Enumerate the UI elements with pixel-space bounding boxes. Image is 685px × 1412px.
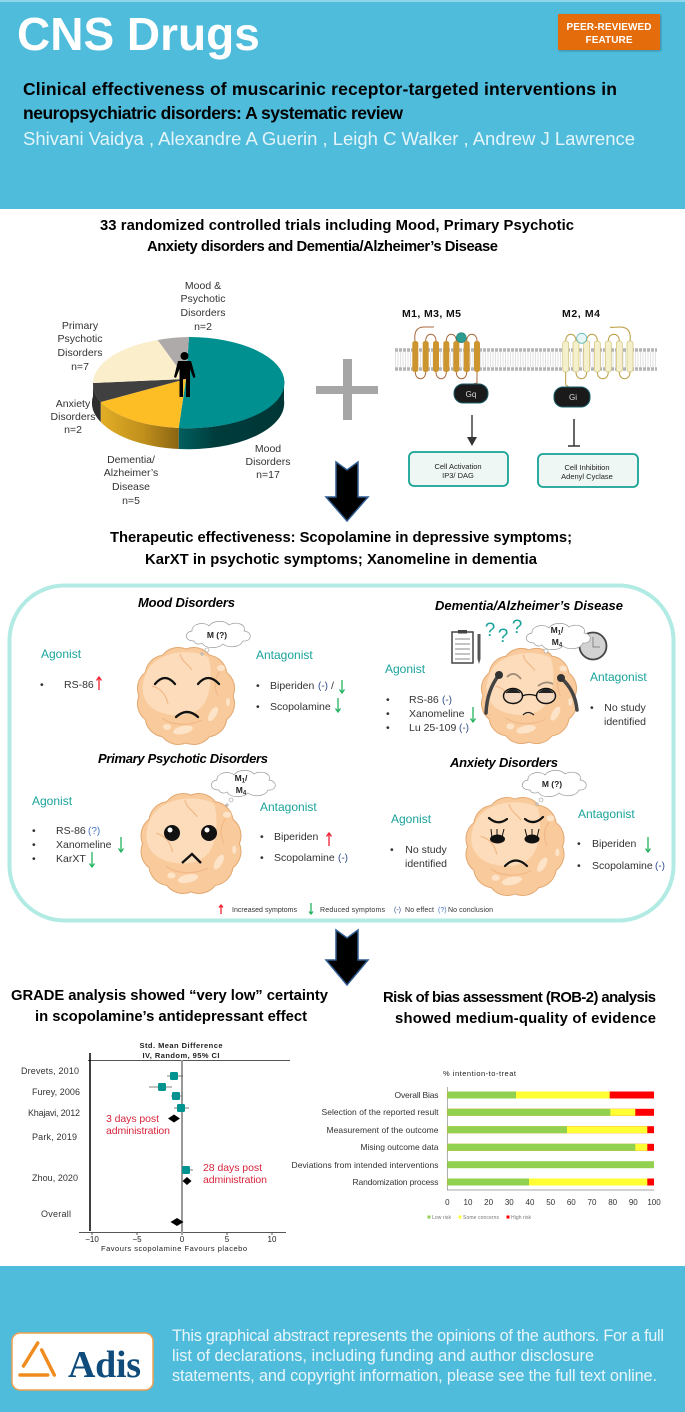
axis ticks: 70 [588, 1198, 597, 1207]
heading: therapeutic effectiveness: KarXT in psychotic symptoms; Xanomeline in dementia [145, 552, 538, 568]
bars [447, 1092, 654, 1186]
icon: person [174, 352, 196, 397]
thought bubble: M1/M4: 4 [559, 642, 563, 648]
pie chart: trials by disorder [92, 337, 285, 449]
panel section: dementia: No study [604, 702, 646, 714]
forest plot: −5 [132, 1235, 142, 1244]
pie labels [51, 280, 290, 507]
box: cell activation: IP3/ DAG [442, 471, 474, 480]
panel section: dementia: • [590, 702, 594, 714]
pie labels: Disorders [58, 347, 102, 359]
thought bubble: M1/M4: 4 [243, 790, 247, 796]
arrow: down 1 [326, 462, 368, 521]
panel section: anxiety disorders: No study [405, 844, 447, 856]
pie labels: Psychotic [58, 333, 102, 345]
panel section: primary psychotic disorders [32, 751, 348, 893]
footer band [0, 1266, 685, 1412]
chart legend [428, 1215, 532, 1221]
panel section: mood disorders: Antagonist [256, 648, 313, 662]
panel section: dementia [385, 598, 647, 744]
panel section: primary psychotic disorders: • [32, 839, 36, 851]
axis ticks: 50 [546, 1198, 556, 1207]
panel section: anxiety disorders: Anxiety Disorders [449, 755, 558, 770]
axis ticks: 100 [647, 1198, 661, 1207]
badge: peer-reviewed feature: PEER-REVIEWED [566, 22, 652, 33]
panel section: mood disorders: Biperiden [270, 680, 315, 692]
question marks: ? [485, 620, 495, 641]
thought bubble: M1/M4: M [236, 785, 243, 795]
diagram: muscarinic receptors [395, 308, 657, 487]
forest plot: IV, Random, 95% CI [142, 1051, 220, 1060]
panel section: mood disorders: • [256, 680, 260, 692]
legend: symptom effects: (-) [394, 907, 401, 914]
panel section: primary psychotic disorders: KarXT [56, 853, 86, 865]
plus sign [316, 359, 378, 420]
panel section: mood disorders: • [40, 679, 44, 691]
panel section: mood disorders: Mood Disorders [138, 595, 235, 610]
panel section: anxiety disorders: Biperiden [592, 838, 637, 850]
question marks: ? [498, 626, 508, 647]
heading: GRADE analysis: GRADE analysis showed “very low” certainty [11, 988, 329, 1004]
study labels: Overall [41, 1209, 71, 1219]
thought bubble: M1/M4: M [551, 625, 558, 635]
pie labels: n=5 [122, 495, 140, 507]
heading: risk of bias [383, 990, 656, 1027]
box: cell inhibition: Adenyl Cyclase [561, 472, 613, 481]
legend: symptom effects: No effect [405, 907, 434, 914]
thought bubble: M1/M4: M [552, 637, 559, 647]
panel section: primary psychotic disorders: Scopolamine [274, 852, 335, 864]
disclaimer text: This graphical abstract represents the opinions of the authors. For a full [172, 1327, 664, 1345]
thought bubble: M1/M4: 1 [242, 778, 246, 784]
thought bubble: M1/M4 [211, 770, 275, 806]
header band [0, 0, 685, 209]
pie labels: Primary [62, 320, 99, 332]
panel section: primary psychotic disorders: • [32, 825, 36, 837]
panel section: anxiety disorders: • [390, 844, 394, 856]
heading: GRADE analysis: in scopolamine’s antidepressant effect [35, 1009, 307, 1025]
axis ticks: 80 [608, 1198, 618, 1207]
legend: symptom effects: (?) [438, 907, 447, 914]
legend: symptom effects: Reduced symptoms [320, 907, 386, 914]
Gi protein [554, 387, 590, 407]
badge: peer-reviewed feature: FEATURE [586, 35, 633, 46]
panel section: mood disorders [40, 595, 344, 745]
panel section: dementia: (-) [459, 723, 469, 734]
membrane [395, 350, 657, 369]
thought bubble: M1/M4: / [245, 773, 248, 783]
thought bubble: M (?) [186, 621, 250, 655]
panel section: mood disorders: • [256, 701, 260, 713]
panel section: primary psychotic disorders: Antagonist [260, 800, 317, 814]
arrow: activation [467, 415, 477, 446]
chart legend: High risk [511, 1215, 532, 1221]
bar labels [292, 1090, 439, 1187]
brain: dementia [481, 648, 577, 744]
box: cell activation [409, 452, 508, 486]
disclaimer text: list of declarations, including funding and author disclosure [172, 1347, 594, 1365]
panel section: dementia: identified [604, 716, 646, 728]
panel section: dementia: • [386, 694, 390, 706]
panel section: anxiety disorders: Antagonist [578, 807, 635, 821]
pie labels: Disorders [51, 411, 95, 423]
panel section: dementia: Lu 25-109 [409, 722, 456, 734]
heading: trials: Anxiety disorders and Dementia/Alzheimer’s Disease [147, 239, 498, 255]
bar labels: Deviations from intended interventions [292, 1160, 438, 1170]
study labels: Drevets, 2010 [21, 1066, 79, 1076]
pie labels: Disorders [246, 456, 290, 468]
brain: anxiety [466, 797, 564, 896]
annotation: 3 days: 3 days post [106, 1113, 159, 1125]
pie labels: Disease [112, 481, 150, 493]
receptor labels: M1, M3, M5 [402, 308, 461, 320]
forest plot: Std. Mean Difference [140, 1041, 222, 1050]
panel section: anxiety disorders: identified [405, 858, 447, 870]
study labels: Khajavi, 2012 [28, 1108, 80, 1118]
forest plot: Favours scopolamine Favours placebo [101, 1244, 247, 1253]
panel section: primary psychotic disorders: • [260, 852, 264, 864]
panel section: mood disorders: Scopolamine [270, 701, 331, 713]
chart legend: Some concerns [463, 1215, 500, 1221]
thought bubble: M1/M4: 1 [558, 630, 562, 636]
panel: therapeutic effectiveness [10, 586, 674, 920]
brain: mood [137, 647, 235, 745]
Gq protein: Gq [466, 390, 476, 399]
pie labels: Psychotic [181, 293, 225, 305]
effect sizes [149, 1072, 193, 1226]
thought bubble: M (?): M (?) [542, 779, 562, 789]
panel section: dementia: Agonist [385, 662, 426, 676]
arrow: down 2 [326, 930, 368, 985]
stacked bar chart: risk of bias: % intention-to-treat [443, 1069, 517, 1078]
panel section: dementia: Xanomeline [409, 708, 465, 720]
heading: therapeutic effectiveness [110, 530, 572, 568]
annotation: 3 days [106, 1113, 170, 1137]
panel section: anxiety disorders [390, 755, 665, 896]
question marks [485, 617, 522, 647]
panel section: mood disorders: Agonist [41, 647, 82, 661]
axis ticks: 10 [464, 1198, 473, 1207]
forest plot: 10 [268, 1235, 277, 1244]
annotation: 28 days [203, 1162, 267, 1186]
study labels: Zhou, 2020 [32, 1173, 78, 1183]
brain: psychotic [141, 794, 241, 893]
pie labels: Alzheimer’s [104, 467, 158, 479]
panel section: anxiety disorders: • [577, 860, 581, 872]
heading: trials [100, 218, 574, 255]
panel section: primary psychotic disorders: Agonist [32, 794, 73, 808]
legend: symptom effects [219, 903, 493, 914]
panel section: mood disorders: RS-86 [64, 679, 94, 691]
article title [23, 79, 617, 123]
heading: GRADE analysis [11, 988, 329, 1025]
disclaimer text: statements, and copyright information, please see the full text online. [172, 1367, 657, 1385]
Gi protein: Gi [569, 393, 577, 402]
axis ticks: 30 [505, 1198, 514, 1207]
stacked bar chart: risk of bias [292, 1069, 661, 1221]
pie labels: n=2 [64, 424, 82, 436]
annotation: 3 days: administration [106, 1125, 170, 1137]
panel section: dementia: Dementia/Alzheimer’s Disease [435, 598, 623, 613]
study labels: Park, 2019 [32, 1132, 77, 1142]
pie labels: n=2 [194, 321, 212, 333]
pie labels: Disorders [181, 307, 225, 319]
axis ticks [445, 1198, 661, 1207]
legend: symptom effects: Increased symptoms [232, 907, 298, 914]
box: cell activation: Cell Activation [434, 462, 482, 471]
axis ticks: 0 [445, 1198, 450, 1207]
panel section: dementia: Antagonist [590, 670, 647, 684]
receptor M1 M3 M5 [412, 327, 480, 384]
pie labels: Mood & [185, 280, 221, 292]
panel section: dementia: (-) [442, 695, 452, 706]
panel section: anxiety disorders: Agonist [391, 812, 432, 826]
panel section: mood disorders: (-) [318, 681, 328, 692]
authors: Shivani Vaidya , Alexandre A Guerin , Leigh C Walker , Andrew J Lawrence [23, 128, 635, 149]
panel section: primary psychotic disorders: • [32, 853, 36, 865]
question marks: ? [512, 617, 522, 638]
panel section: primary psychotic disorders: Xanomeline [56, 839, 112, 851]
axis ticks: 90 [629, 1198, 638, 1207]
icon: clipboard and pen [452, 630, 480, 664]
article title: neuropsychiatric disorders: A systematic review [23, 103, 403, 123]
badge: peer-reviewed feature [558, 14, 660, 50]
journal title: CNS Drugs [17, 8, 260, 60]
heading: therapeutic effectiveness: Therapeutic effectiveness: Scopolamine in depressive symptoms; [110, 530, 572, 546]
bar labels: Randomization process [352, 1177, 438, 1187]
box: cell inhibition: Cell Inhibition [564, 463, 610, 472]
pie labels: Mood [255, 443, 281, 455]
pie labels: n=17 [256, 469, 280, 481]
logo: Adis: Adis [68, 1344, 141, 1386]
heading: risk of bias: Risk of bias assessment (ROB-2) analysis [383, 990, 656, 1006]
receptor M2 M4 [563, 327, 633, 387]
bar labels: Mising outcome data [360, 1142, 439, 1152]
panel section: primary psychotic disorders: (?) [88, 826, 100, 837]
annotation: 28 days: 28 days post [203, 1162, 262, 1174]
panel section: anxiety disorders: (-) [655, 861, 665, 872]
pie labels: n=7 [71, 361, 89, 373]
thought bubble: M1/M4: M [235, 773, 242, 783]
thought bubble: M (?): M (?) [207, 630, 227, 640]
panel section: dementia: RS-86 [409, 694, 439, 706]
forest plot [21, 1041, 290, 1253]
study labels [21, 1066, 80, 1219]
article title: Clinical effectiveness of muscarinic receptor-targeted interventions in [23, 79, 617, 99]
legend: symptom effects: No conclusion [448, 907, 493, 914]
axis ticks: 60 [567, 1198, 576, 1207]
logo: Adis [12, 1333, 153, 1390]
panel section: primary psychotic disorders: RS-86 [56, 825, 86, 837]
pie labels: Dementia/ [107, 454, 155, 466]
axis ticks: 40 [526, 1198, 535, 1207]
Gq protein [454, 384, 488, 403]
panel section: anxiety disorders: • [577, 838, 581, 850]
panel section: primary psychotic disorders: Primary Psychotic Disorders [98, 751, 268, 766]
annotation: 28 days: administration [203, 1174, 267, 1186]
box: cell inhibition [538, 454, 638, 487]
panel section: mood disorders: / [331, 680, 334, 692]
thought bubble: M (?) [522, 770, 586, 805]
panel section: primary psychotic disorders: (-) [338, 853, 348, 864]
thought bubble: M1/M4 [526, 623, 590, 653]
thought bubble: M1/M4: / [561, 625, 564, 635]
bar labels: Selection of the reported result [322, 1107, 439, 1117]
panel section: primary psychotic disorders: Biperiden [274, 831, 319, 843]
diagram: muscarinic receptors: M2, M4 [562, 308, 600, 320]
panel section: primary psychotic disorders: • [260, 831, 264, 843]
study labels: Furey, 2006 [32, 1087, 80, 1097]
forest plot: 5 [225, 1235, 230, 1244]
bar labels: Measurement of the outcome [326, 1125, 439, 1135]
icon: clock [580, 632, 606, 660]
heading: trials: 33 randomized controlled trials including Mood, Primary Psychotic [100, 218, 574, 234]
panel section: anxiety disorders: Scopolamine [592, 860, 653, 872]
pie labels: Anxiety [56, 398, 91, 410]
forest plot: 0 [180, 1235, 185, 1244]
panel section: dementia: • [386, 722, 390, 734]
axis ticks: 20 [484, 1198, 494, 1207]
panel section: dementia: • [386, 708, 390, 720]
inhibition bar [568, 419, 580, 446]
heading: risk of bias: showed medium-quality of evidence [395, 1011, 656, 1027]
disclaimer text [172, 1327, 664, 1385]
bar labels: Overall Bias [394, 1090, 438, 1100]
chart legend: Low risk [432, 1215, 452, 1221]
forest plot: −10 [85, 1235, 99, 1244]
